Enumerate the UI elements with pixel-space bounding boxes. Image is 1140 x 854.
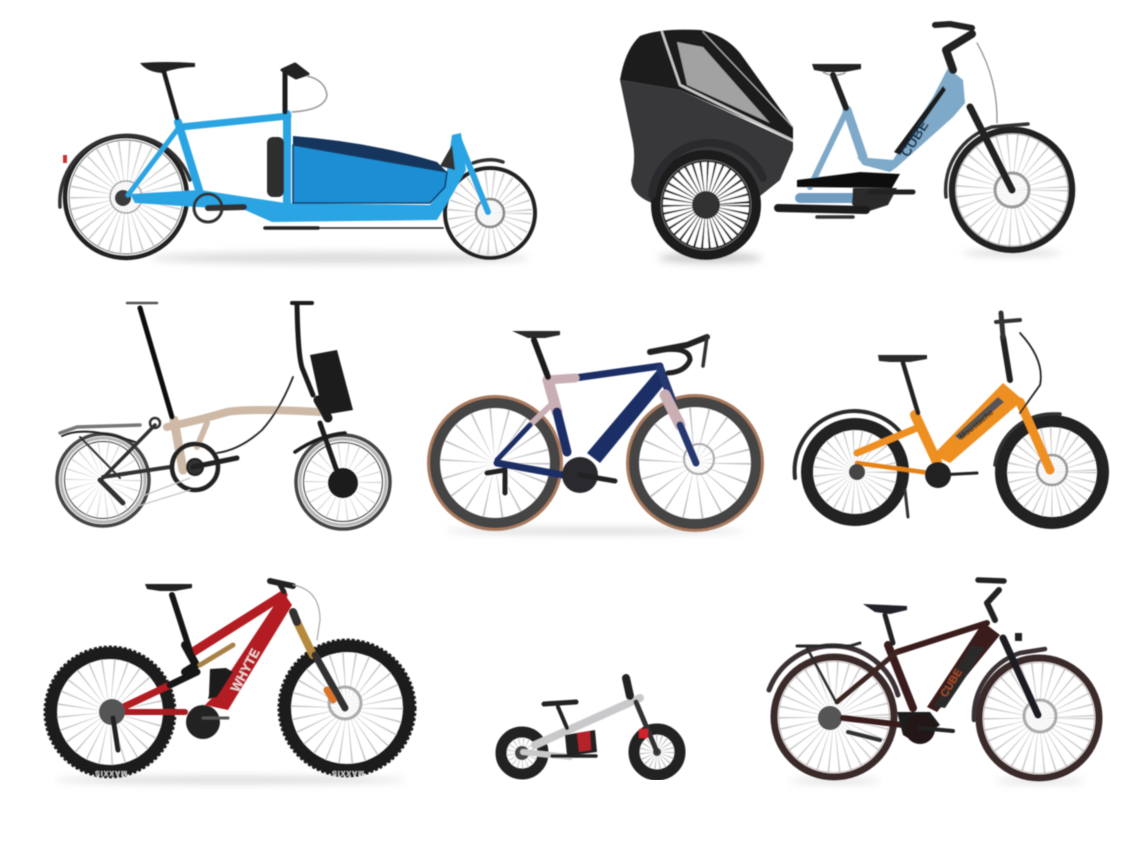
saddle and handlebar [140, 62, 327, 118]
frame: CUBE [938, 667, 965, 700]
bike: folding e-bike in beige [57, 303, 390, 529]
rear wheel [769, 646, 898, 777]
front wheel [946, 124, 1072, 250]
fork, clamp, bars and saddle [544, 678, 657, 752]
seat post and saddle [127, 303, 172, 417]
beige frame [167, 410, 320, 470]
red frame: WHYTE [227, 646, 263, 694]
front wheel [634, 729, 680, 775]
silver frame [523, 698, 640, 757]
frame [778, 68, 1012, 217]
frame: Moustache [958, 407, 996, 442]
bike: orange compact e-bike [795, 313, 1103, 523]
rear wheel [795, 411, 903, 520]
frame lower beam [130, 133, 466, 222]
frame [497, 366, 696, 475]
blue frame [128, 114, 488, 212]
frame [857, 383, 1050, 473]
rear wheel [501, 732, 543, 774]
saddle and bars [812, 24, 997, 123]
battery with red panel [552, 730, 597, 756]
motor and derailleur [99, 699, 228, 750]
saddle and drop bars [512, 331, 707, 377]
front wheel [628, 396, 762, 530]
trailer wheel [652, 143, 763, 254]
cargo box [267, 136, 455, 203]
trailer shell [620, 30, 793, 203]
front wheel [445, 160, 535, 258]
bike: navy and pink drop-bar e-road bike [429, 331, 762, 534]
bike: blue cargo bike [60, 62, 535, 264]
rear wheel [429, 397, 561, 529]
rear triangle and rack [60, 418, 170, 503]
rear wheel [45, 647, 175, 777]
frame: CUBE [897, 117, 932, 160]
front wheel: MAXXIS [331, 769, 364, 776]
bike: red full-suspension e-MTB [45, 581, 415, 783]
bike: small children's electric balance bike [501, 678, 680, 775]
rear rack [797, 643, 860, 702]
rear wheel [57, 434, 149, 526]
frame [837, 622, 1038, 725]
rear wheel [60, 135, 190, 258]
chainring and cable [135, 377, 293, 507]
saddle and handlebar [878, 313, 1041, 413]
battery bag [310, 350, 353, 415]
drivetrain [487, 457, 615, 493]
front wheel [995, 414, 1103, 523]
saddle and bars [145, 581, 320, 640]
rear wheel: MAXXIS [94, 769, 127, 776]
motor and crank [849, 462, 977, 517]
front wheel with hub motor [296, 435, 390, 529]
red frame [113, 592, 292, 712]
front wheel [974, 649, 1099, 778]
saddle, stem, bars and light [863, 580, 1022, 643]
front column, fork [292, 303, 345, 480]
shock and battery [200, 645, 233, 699]
drivetrain and stand [194, 194, 443, 228]
bike: dark brown trekking e-bike with rack [769, 580, 1099, 783]
fork [293, 612, 345, 708]
motor and crank [848, 712, 953, 744]
bike: blue-grey e-bike towing a black child trailer [620, 24, 1072, 263]
front wheel [279, 640, 415, 776]
